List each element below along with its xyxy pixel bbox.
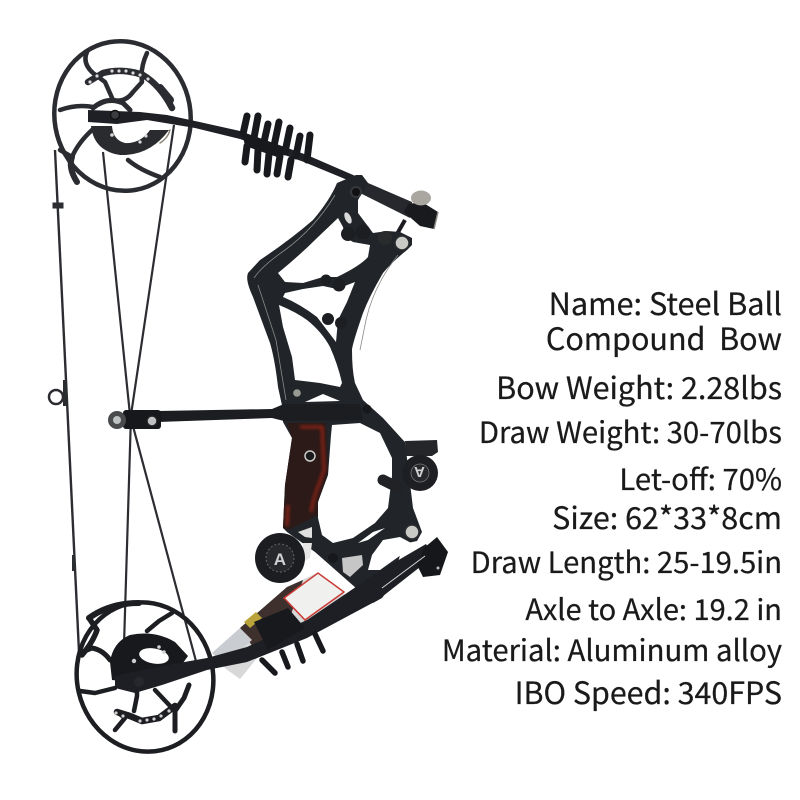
rest mount upper right [383,440,438,491]
specifications text block [442,279,782,713]
spec: material: Material: Aluminum alloy [442,628,782,670]
bow illustration [43,30,448,765]
lower inner cam [110,634,188,682]
upper cam wheel [43,30,202,202]
grip screw [305,451,315,461]
peep sight ring [49,380,67,406]
upper limb dampener [242,116,310,177]
bow strings and cables [53,125,197,665]
riser bolts [290,389,375,590]
product tag behind lower limb [212,573,345,679]
upper cam crescent [91,126,169,155]
crescent hole [358,528,385,543]
small silver holes [298,527,312,538]
upper limb [88,110,362,186]
triangle hole [342,555,363,577]
lower limb end mount [382,537,448,588]
spec: name second line: Compound Bow [546,315,782,359]
riser [247,175,422,603]
string slide with rollers [108,410,161,429]
upper limb pivot hub [110,110,120,120]
lower limb [115,544,434,693]
grip [283,423,328,530]
silver disc upper [395,236,409,250]
spec: IBO speed: IBO Speed: 340FPS [515,669,782,713]
spec: let-off: Let-off: 70% [619,457,782,499]
rest wheel lower left [255,533,305,583]
lower limb dampener [254,608,323,673]
cam timing holes [88,69,150,144]
riser bottom sliver [305,394,340,402]
spec: bow weight: Bow Weight: 2.28lbs [496,364,782,408]
rest wheel lower left: A [274,550,286,569]
riser window upper [278,218,370,283]
grip red streak [287,427,324,526]
spec: axle to axle: Axle to Axle: 19.2 in [525,587,782,629]
silver disc lower [405,525,419,539]
riser window middle [283,282,355,342]
rest mount upper right: A [414,463,425,480]
riser ring window [318,423,392,543]
stabiliser shelf bar [158,404,363,422]
upper limb end mount [358,178,438,234]
riser silver highlights [254,195,398,400]
spec: draw length: Draw Length: 25-19.5in [471,540,782,582]
riser joint bolts [320,187,392,329]
riser window lower [279,305,342,387]
spec: size: Size: 62*33*8cm [552,494,782,538]
large lower hole [368,537,415,570]
spec: draw weight: Draw Weight: 30-70lbs [479,410,782,452]
spec: name: Name: Steel Ball [549,279,782,324]
link hole [343,211,353,225]
lower limb pivot hub [134,677,144,687]
lower cam wheel [62,589,228,765]
